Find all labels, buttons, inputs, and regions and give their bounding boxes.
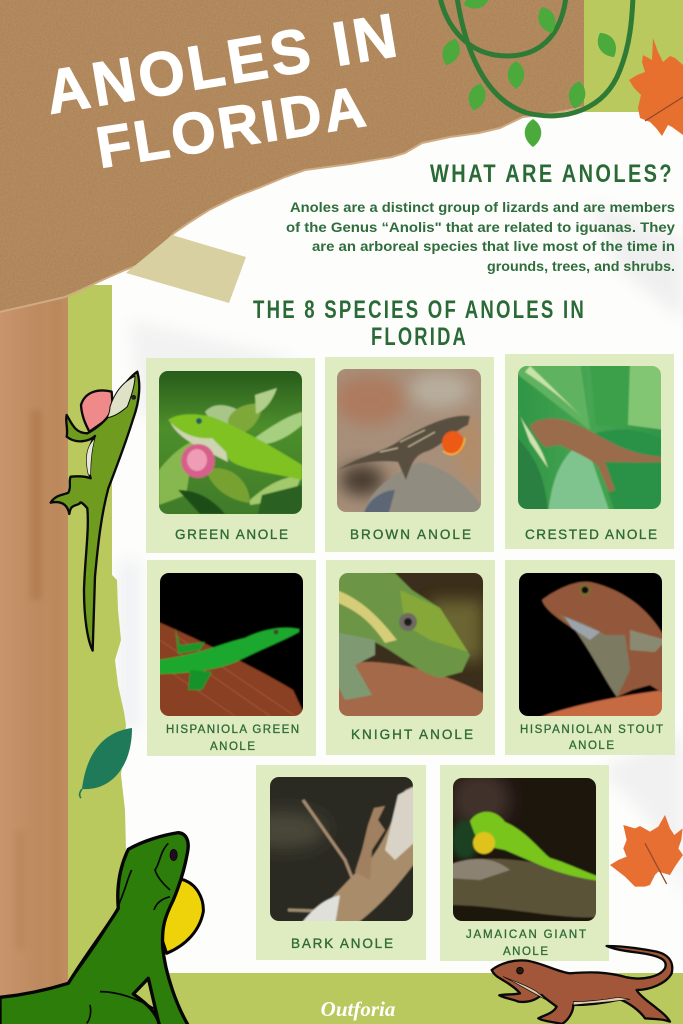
text block: description: are an arboreal species that live most of the time in: [312, 238, 675, 254]
logo: Outforia: Outforia: [321, 997, 395, 1021]
title: ANOLES IN: [41, 1, 405, 128]
label: ANOLE: [569, 740, 614, 752]
body: [0, 833, 190, 1024]
title: [41, 1, 405, 181]
photo: knight anole: [339, 573, 483, 716]
illustration: brown anole: [492, 946, 672, 1024]
panel: green anole card: [146, 358, 315, 553]
label: JAMAICAN GIANT: [466, 929, 586, 941]
heading: the 8 species: FLORIDA: [371, 323, 468, 351]
label: GREEN ANOLE: [175, 527, 288, 542]
label: ANOLE: [503, 946, 548, 958]
label: [520, 724, 663, 752]
label: BROWN ANOLE: [350, 527, 471, 542]
wood trunk panel: [0, 290, 68, 1024]
vines with leaves: [438, 0, 633, 147]
heading: the 8 species: [253, 296, 586, 351]
photo: jamaican giant anole: [453, 778, 596, 921]
photo: brown anole: [337, 369, 481, 512]
dewlap: [81, 390, 113, 432]
text block: description: Anoles are a distinct group of lizards and are members: [290, 199, 675, 215]
label: ANOLE: [210, 741, 255, 753]
label: HISPANIOLAN STOUT: [520, 724, 663, 736]
label: [166, 724, 299, 753]
photo: bark anole: [270, 777, 413, 921]
panel: brown anole card: [325, 357, 494, 552]
panel: hispaniolan stout anole card: [505, 560, 675, 755]
panel: jamaican giant anole card: [440, 765, 609, 961]
icon: teal leaf: [80, 728, 132, 798]
illustration: green anole climbing: [51, 372, 139, 651]
label: HISPANIOLA GREEN: [166, 724, 299, 736]
green strip with torn edge: [68, 285, 130, 1024]
photo: crested anole: [518, 366, 661, 509]
text block: description: grounds, trees, and shrubs.: [487, 258, 675, 274]
icon: maple leaf top right: [629, 38, 683, 136]
belly patch: [86, 438, 95, 475]
icon: maple leaf lower right: [610, 815, 683, 887]
title: FLORIDA: [92, 74, 373, 181]
kraft paper panel: [0, 0, 584, 313]
photo: hispaniolan stout anole: [519, 573, 662, 716]
text block: description: of the Genus “Anolis" that are related to iguanas. They: [286, 219, 675, 235]
green bottom band: [68, 973, 683, 1024]
label: KNIGHT ANOLE: [351, 727, 473, 742]
yellow dewlap: [160, 879, 203, 953]
photo: green anole: [159, 371, 302, 514]
label: CRESTED ANOLE: [525, 527, 657, 542]
panel: knight anole card: [326, 560, 495, 755]
illustration: large green anole: [0, 833, 203, 1024]
photo: hispaniola green anole: [160, 573, 303, 716]
text block: description: [286, 199, 675, 274]
green top-right block: [584, 0, 683, 112]
masking tape: [126, 235, 246, 303]
body: [51, 372, 139, 651]
panel: crested anole card: [505, 354, 674, 549]
throat patch: [107, 376, 135, 418]
label: [466, 929, 586, 958]
wood grain: [15, 300, 62, 1020]
panel: hispaniola green anole card: [147, 560, 316, 756]
panel: bark anole card: [245, 765, 426, 960]
label: BARK ANOLE: [291, 936, 393, 951]
